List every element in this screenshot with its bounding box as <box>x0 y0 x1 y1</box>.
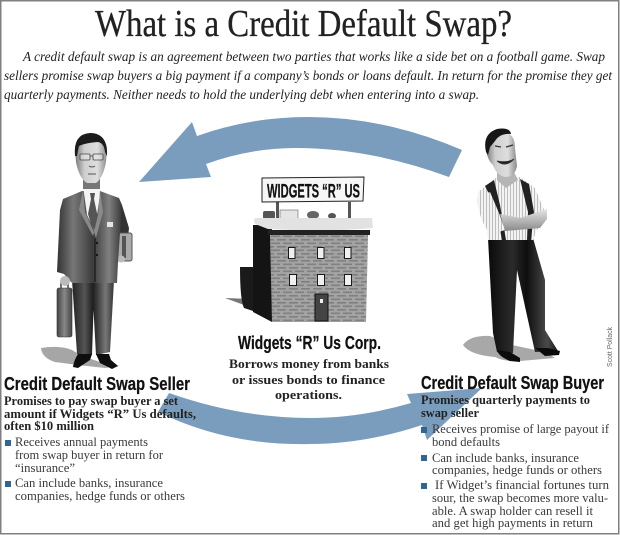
eyes <box>495 145 513 147</box>
briefcase <box>57 282 72 337</box>
seller summary: Promises to pay swap buyer a set <box>4 394 179 408</box>
illustration: swap buyer with crossed arms <box>463 129 560 362</box>
buyer bullets: bond defaults <box>432 435 500 449</box>
buyer bullets: able. A swap holder can resell it <box>432 504 593 518</box>
buyer summary <box>421 393 590 420</box>
ground shadow <box>225 298 277 317</box>
title: What is a Credit Default Swap? <box>95 3 512 45</box>
trousers <box>488 238 558 353</box>
buyer bullets: Receives promise of large payout if <box>432 422 610 436</box>
buyer summary: swap seller <box>421 406 479 420</box>
striped shirt <box>478 177 547 240</box>
lower annex <box>240 267 256 312</box>
illustration: swap seller in suit <box>41 133 132 369</box>
illustrator credit: Scott Pollack <box>605 327 614 367</box>
glasses <box>80 154 103 160</box>
neck <box>497 168 518 188</box>
windows <box>288 248 352 286</box>
arrow: bottom, seller to buyer <box>158 388 482 444</box>
head <box>75 136 107 183</box>
arm with book <box>117 200 132 262</box>
lapels <box>79 190 103 238</box>
arrow: top, buyer to seller <box>139 117 462 182</box>
buyer bullets: and get high payments in return <box>432 516 594 530</box>
front brick wall <box>270 235 368 322</box>
seller summary <box>4 394 196 433</box>
intro text <box>4 50 613 103</box>
door <box>315 294 328 321</box>
side wall <box>253 225 272 322</box>
center description: operations. <box>275 388 342 402</box>
seller bullets: Can include banks, insurance <box>15 476 163 490</box>
shoes <box>73 354 118 369</box>
center description: or issues bonds to finance <box>232 373 385 387</box>
buyer summary: Promises quarterly payments to <box>421 393 590 407</box>
shirt and tie <box>83 186 100 232</box>
crossed arms <box>478 192 547 234</box>
neck <box>83 178 100 189</box>
buyer bullets <box>421 422 610 530</box>
center description <box>229 357 389 402</box>
sign board: WIDGETS “R” US <box>267 182 360 202</box>
center heading: Widgets “R” Us Corp. <box>238 333 381 353</box>
jacket center line and buttons <box>95 238 98 282</box>
suspenders <box>485 179 534 240</box>
seller bullets: Receives annual payments <box>15 435 148 449</box>
seller bullets: companies, hedge funds or others <box>15 489 185 503</box>
seller bullets: “insurance” <box>15 461 75 475</box>
mouth and nose <box>88 166 96 174</box>
hand <box>60 276 70 286</box>
trousers <box>72 280 114 355</box>
head <box>486 132 517 177</box>
smile <box>497 159 514 164</box>
rooftop equipment <box>263 210 336 219</box>
hair <box>485 129 511 155</box>
seller summary: amount if Widgets “R” Us defaults, <box>4 407 196 421</box>
illustration: Widgets R Us building <box>225 177 373 322</box>
buyer bullets: companies, hedge funds or others <box>432 463 602 477</box>
sign board <box>262 177 364 202</box>
buyer bullets: Can include banks, insurance <box>432 451 579 465</box>
seller bullets: from swap buyer in return for <box>15 448 164 462</box>
shadow <box>463 336 555 361</box>
jacket <box>57 191 122 283</box>
hair <box>75 133 107 156</box>
buyer bullets: sour, the swap becomes more valu- <box>432 491 608 505</box>
shadow <box>41 347 120 368</box>
sign posts <box>276 202 351 220</box>
shoes <box>497 348 560 362</box>
seller heading: Credit Default Swap Seller <box>4 373 190 394</box>
roof cornice <box>254 218 373 230</box>
seller summary: often $10 million <box>4 419 94 433</box>
seller bullets <box>5 435 185 503</box>
buyer bullets: If Widget’s financial fortunes turn <box>435 478 610 492</box>
center description: Borrows money from banks <box>229 357 389 371</box>
pocket square <box>107 222 113 227</box>
intro text: quarterly payments. Neither needs to hold the underlying debt when entering into a swap. <box>4 88 479 103</box>
